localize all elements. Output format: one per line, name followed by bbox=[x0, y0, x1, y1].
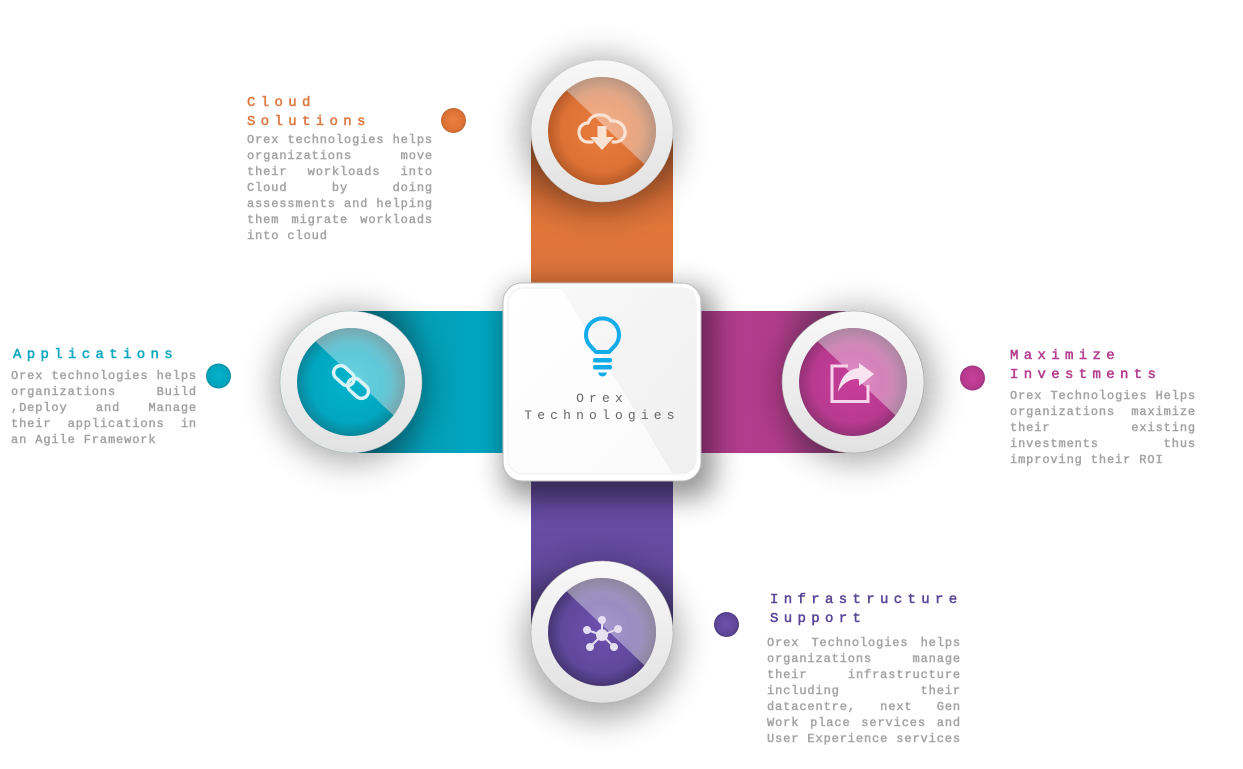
description: cloud solutions: their workloads into bbox=[247, 165, 433, 179]
heading: cloud solutions: Solutions bbox=[247, 114, 371, 130]
description: maximize investments: Orex Technologies Helps bbox=[1010, 389, 1196, 403]
icon: share arrow bbox=[832, 363, 874, 402]
teal dial shadow bbox=[275, 310, 427, 462]
heading: maximize investments: Investments bbox=[1010, 367, 1161, 383]
icon: network hub bbox=[583, 616, 622, 651]
heading: infrastructure support: Support bbox=[770, 611, 866, 627]
panel: center card bbox=[503, 283, 714, 498]
purple bar bbox=[531, 480, 673, 632]
description: maximize investments: their existing bbox=[1010, 421, 1196, 435]
description: cloud solutions: them migrate workloads bbox=[247, 213, 433, 227]
connector dot: infrastructure bbox=[714, 612, 739, 637]
panel: cloud solutions arm bbox=[524, 58, 676, 284]
connector dot: cloud bbox=[441, 108, 466, 133]
card gloss bbox=[561, 288, 696, 473]
panel: maximize investments arm bbox=[700, 310, 933, 462]
teal dial bbox=[280, 311, 422, 453]
heading: maximize investments bbox=[1010, 348, 1161, 383]
center card title bbox=[524, 391, 680, 423]
description: applications: organizations Build bbox=[11, 385, 197, 399]
description: infrastructure support: Work place services and bbox=[767, 716, 961, 730]
text block: cloud solutions bbox=[247, 95, 433, 243]
magenta dial shadow bbox=[781, 310, 933, 462]
text block: infrastructure support bbox=[766, 592, 963, 746]
teal bar bbox=[351, 311, 504, 453]
heading: applications: Applications bbox=[13, 347, 178, 363]
card shadow bbox=[504, 288, 714, 498]
icon: light bulb bbox=[586, 318, 619, 376]
connector dot: investments bbox=[960, 366, 985, 390]
description: cloud solutions: into cloud bbox=[247, 229, 328, 243]
connector dot: applications bbox=[206, 364, 231, 388]
description: applications: Orex technologies helps bbox=[11, 369, 197, 383]
description: maximize investments: investments thus bbox=[1010, 437, 1196, 451]
purple dial bbox=[531, 561, 673, 703]
description: maximize investments: organizations maximize bbox=[1010, 405, 1196, 419]
purple dial shadow bbox=[526, 566, 678, 718]
text block: applications bbox=[11, 347, 197, 447]
description: applications bbox=[11, 369, 197, 447]
description: infrastructure support: datacentre, next Gen bbox=[767, 700, 961, 714]
heading: cloud solutions: Cloud bbox=[247, 95, 316, 111]
description: infrastructure support: Orex Technologies helps bbox=[767, 636, 961, 650]
panel: applications arm bbox=[275, 310, 504, 462]
description: cloud solutions: Orex technologies helps bbox=[247, 133, 433, 147]
description: applications: an Agile Framework bbox=[11, 433, 156, 447]
description: applications: their applications in bbox=[11, 417, 197, 431]
description: applications: ,Deploy and Manage bbox=[11, 401, 197, 415]
icon: chain link bbox=[331, 363, 371, 401]
center card title: Orex bbox=[576, 391, 628, 406]
description: infrastructure support bbox=[766, 636, 961, 746]
heading: cloud solutions bbox=[247, 95, 371, 130]
description: infrastructure support: including their bbox=[767, 684, 961, 698]
description: maximize investments bbox=[1010, 389, 1196, 467]
orange bar bbox=[531, 131, 673, 284]
description: cloud solutions bbox=[247, 133, 433, 243]
description: infrastructure support: their infrastructure bbox=[767, 668, 961, 682]
infographic artwork bbox=[206, 39, 985, 738]
heading: infrastructure support: Infrastructure bbox=[770, 592, 963, 608]
description: cloud solutions: assessments and helping bbox=[247, 197, 433, 211]
heading: infrastructure support bbox=[770, 592, 963, 627]
description: cloud solutions: organizations move bbox=[247, 149, 433, 163]
text block: maximize investments bbox=[1010, 348, 1196, 467]
center card title: Technologies bbox=[524, 408, 680, 423]
heading: maximize investments: Maximize bbox=[1010, 348, 1120, 364]
description: infrastructure support: User Experience services bbox=[767, 732, 961, 746]
panel: infrastructure support arm bbox=[526, 480, 678, 718]
orange dial shadow bbox=[524, 58, 676, 210]
description: infrastructure support: organizations manage bbox=[767, 652, 961, 666]
magenta bar bbox=[700, 311, 853, 453]
magenta dial bbox=[782, 311, 924, 453]
description: maximize investments: improving their ROI bbox=[1010, 453, 1164, 467]
icon: cloud download bbox=[579, 115, 625, 150]
description: cloud solutions: Cloud by doing bbox=[247, 181, 433, 195]
orange dial bbox=[531, 60, 673, 202]
card body bbox=[503, 283, 701, 481]
